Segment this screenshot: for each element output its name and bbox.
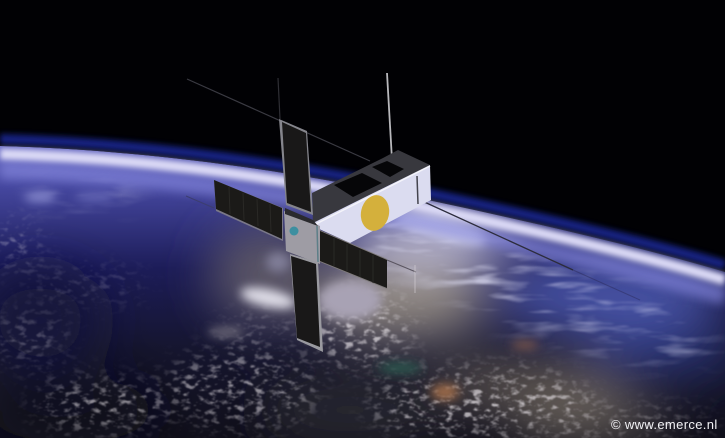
regional colour: haze and land [0,212,725,438]
body: top face [312,150,430,223]
solar panel: top [279,119,313,215]
Earth [0,146,725,438]
antennas [186,73,640,300]
gold disc [358,192,392,234]
body: white side face [313,165,431,243]
atmosphere glow [0,139,725,265]
watermark text: © www.emerce.nl [611,417,718,432]
satellite [186,73,640,352]
bright cloud masses [24,193,539,400]
central face [284,208,320,264]
ocean base [0,146,725,438]
bright limb band [0,154,725,280]
solar panel: left [214,180,283,241]
body edge highlight [316,166,430,224]
solar panel: right [320,230,387,289]
body: hatch window 2 [372,161,404,177]
solar panel: bottom [290,254,323,352]
side rail [417,176,418,204]
inner limb haze [0,170,725,296]
body: hatch window 1 [334,173,382,197]
procedural land and cloud texture [0,214,722,438]
streak clouds [46,184,724,366]
